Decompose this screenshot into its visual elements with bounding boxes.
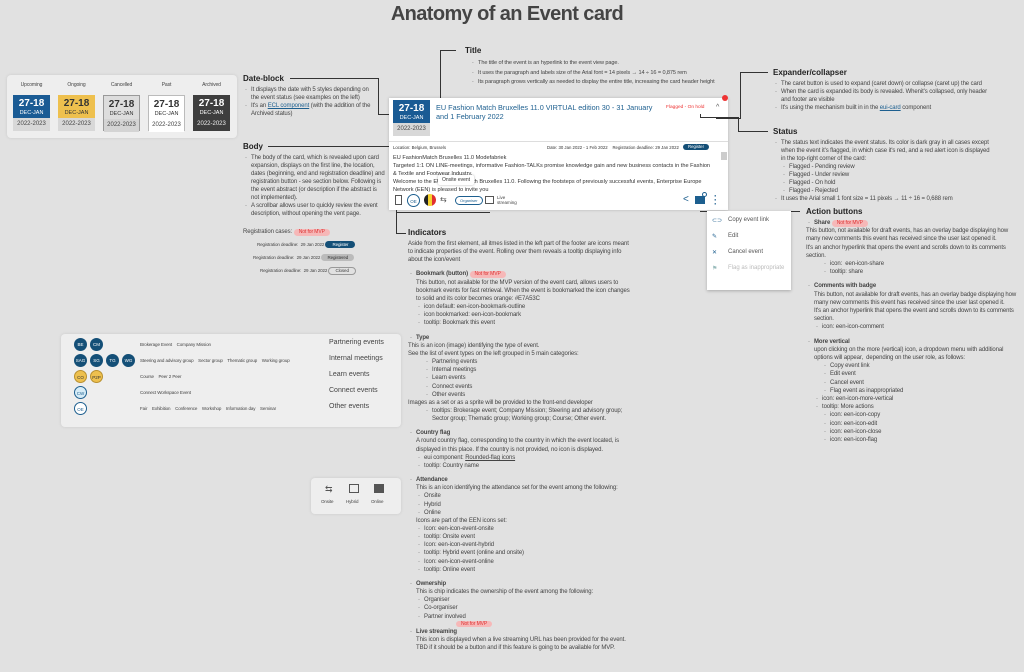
card body (389, 141, 728, 192)
text: indicators: Other events (432, 392, 465, 398)
panel: attendance icons (311, 478, 401, 514)
panel: date-block styles: 27-18 (109, 99, 134, 110)
card footer indicators: streaming (497, 200, 517, 205)
text: indicators: This is an icon identifying the attendance set for the event among the following: Icons are part of the EEN icons set: (416, 485, 618, 524)
registration cases: Registration deadline: 29 Jan 2022 (253, 255, 320, 260)
heading: expander: Expander/collapser (773, 68, 847, 77)
text: indicators: Connect events (432, 384, 472, 390)
row: other (74, 402, 369, 415)
panel: date-block styles: 27-18 (19, 98, 44, 109)
text: indicators: See the list of event types on the left grouped in 5 main categories: Images as a set or as a sprite will be provided to the front-end developer (408, 351, 593, 406)
text: action buttons: upon clicking on the more (vertical) icon, a dropdown menu with additional options will appear, depending on the user role, as follows: (814, 347, 1003, 361)
leader lines indicators (396, 210, 397, 234)
text: indicators: Co-organiser (424, 605, 457, 611)
text: indicators: Organiser (424, 597, 449, 603)
panel: date-block styles: 2022-2023 (197, 121, 226, 127)
card footer indicators: OE (410, 199, 417, 204)
dropdown menu: Edit (728, 233, 738, 239)
text: status: Flagged - Pending review (789, 164, 855, 170)
registration cases (243, 228, 356, 275)
text: title: Its paragraph grows vertically as needed to display the entire title, increasing the card header height (478, 79, 715, 85)
text: indicators: icon default: een-icon-bookmark-outline (424, 304, 525, 310)
row: partnering: Partnering events (329, 339, 384, 346)
text: indicators: Internal meetings (432, 367, 476, 373)
text: action buttons: icon: een-icon-comment (822, 324, 884, 330)
row: learn: P2P (92, 375, 101, 380)
row: connect: Connect Workspace Event (140, 390, 191, 395)
text: indicators: Not for MVP (461, 621, 487, 627)
text: date-block: It displays the date with 5 styles depending on the event status (see examples on the left) (251, 87, 369, 101)
row: partnering: Brokerage Event Company Mission (140, 342, 211, 347)
panel: date-block styles: 2022-2023 (62, 121, 91, 127)
heading: body: Body (243, 142, 263, 151)
text: indicators: tooltips: Brokerage event; Company Mission; Steering and advisory group; Sector group; Thematic group; Working group; Course; Other event. (432, 408, 622, 422)
text: indicators: Onsite (424, 493, 441, 499)
heading: date-block: Date-block (243, 74, 284, 83)
tooltip: onsite event (438, 175, 474, 185)
text: action buttons: Flag event as inappropriated (830, 388, 903, 394)
card action icons: · (714, 191, 717, 201)
panel: date-block styles: 2022-2023 (152, 122, 181, 128)
card body: Targeted 1:1 ON LINE-meetings, informative Fashion-TALKs promise knowledge gain and new business contacts in the Fashion & Textile and Footwear Industry. (393, 163, 710, 177)
tooltip: onsite event: Onsite event (442, 177, 470, 183)
panel: attendance icons: Hybrid (346, 499, 358, 504)
event card (389, 98, 728, 210)
row: learn: CO (77, 375, 84, 380)
text: action buttons: This button, not available for draft events, has an overlay badge displaying how many new comments this event has received since the user last opened it. (806, 228, 1008, 242)
text: action buttons: This button, not available for draft events, has an overlay badge displaying how many new comments this event has received since the user last opened it. (814, 292, 1016, 306)
text: status: Flagged - Rejected (789, 188, 838, 194)
text: indicators: This is chip indicates the ownership of the event among the following: (416, 589, 593, 595)
panel: date-block styles: 2022-2023 (17, 121, 46, 127)
text: body: A scrollbar allows user to quickly review the event description, without opening the vent page. (251, 203, 378, 217)
heading: indicators: Indicators (408, 228, 446, 237)
text: action buttons: More vertical (814, 339, 850, 345)
text: indicators: Learn events (432, 375, 466, 381)
dropdown menu: ⊂⊃ (712, 218, 722, 224)
dropdown menu: Copy event link (728, 217, 769, 223)
card date-block: 2022-2023 (397, 126, 426, 132)
text: expander: When the card is expanded its body is revealed. Whenit's collapsed, only header and footer are visible (781, 89, 987, 103)
title: Anatomy of an Event card (391, 3, 623, 25)
card action icons: · (714, 199, 717, 209)
text: indicators: Aside from the first element, all itmes listed in the left part of the footer are icons meant to indicate properties of the event. Rolling over them reveals a tooltip displaying info about the icon/event (408, 241, 629, 263)
dropdown menu (707, 211, 791, 290)
panel: date-block styles: 27-18 (64, 98, 89, 109)
row: internal: Steering and advisory group Sector group Thematic group Working group (140, 358, 290, 363)
text: indicators: Attendance (416, 477, 448, 483)
text: title: The title of the event is an hyperlink to the event view page. (478, 60, 619, 66)
row: internal (74, 354, 383, 367)
text: indicators: tooltip: Country name (424, 463, 479, 469)
text: action buttons: Share (814, 220, 830, 226)
card body: Location: Belgium, Brussels (393, 145, 446, 150)
text: body: The body of the card, which is revealed upon card expansion, displays on the first line, the location, dates (beginning, end and registration deadline) and registration button - see section below. Following is the event abstract (or description if the abstract is not implemented). (251, 155, 385, 201)
registration cases: Registration deadline: 29 Jan 2022 (257, 242, 324, 247)
panel: date-block styles: Upcoming (21, 82, 42, 88)
card date-block: DEC-JAN (400, 115, 423, 121)
text: status: Flagged - On hold (789, 180, 835, 186)
text: indicators (408, 240, 630, 651)
text: indicators: Icon: een-icon-event-hybrid (424, 542, 494, 548)
row: internal: WG (125, 358, 132, 363)
registration cases: Register (332, 242, 348, 247)
panel: date-block styles: 27-18 (199, 98, 224, 109)
text: indicators: Online (424, 510, 441, 516)
row: internal: TG (109, 358, 116, 363)
card action icons: · (714, 195, 717, 205)
card title: EU Fashion Match Bruxelles 11.0 VIRTUAL edition 30 - 31 January and 1 February 2022 (436, 103, 652, 120)
panel: event types (61, 334, 401, 427)
heading: title: Title (465, 46, 481, 55)
text: date-block: It's an ECL component (with the addition of the Archived status) (251, 103, 370, 117)
card date-block: 27-18 (399, 103, 424, 114)
dropdown menu: ✎ (712, 234, 717, 240)
panel: attendance icons: Online (371, 499, 383, 504)
row: partnering (74, 338, 384, 351)
panel: date-block styles: Past (162, 82, 171, 88)
text: action buttons: Cancel event (830, 380, 864, 386)
text: indicators: tooltip: Bookmark this event (424, 320, 495, 326)
text: expander: It's using the mechanism built in in the eui-card component (781, 105, 931, 111)
row: learn (74, 370, 370, 383)
registration cases: Closed (335, 268, 349, 273)
panel: date-block styles: DEC-JAN (200, 110, 223, 116)
row: learn: Course Peer 2 Peer (140, 374, 181, 379)
registration cases: Not for MVP (299, 229, 325, 235)
panel: date-block styles: 27-18 (154, 99, 179, 110)
text: indicators: tooltip: Hybrid event (online and onsite) (424, 550, 524, 556)
text: action buttons: It's an anchor hyperlink that opens the event and scrolls down to its comments section. (806, 245, 1006, 259)
text: action buttons: tooltip: More actions (822, 404, 874, 410)
heading: status: Status (773, 127, 797, 136)
registration cases: Registration cases: (243, 229, 292, 235)
text: indicators: This is an icon (image) identifying the type of event. (408, 343, 539, 349)
text: action buttons: Not for MVP (837, 220, 863, 226)
text: action buttons: icon: een-icon-close (830, 429, 881, 435)
panel: date-block styles: DEC-JAN (110, 111, 133, 117)
text: indicators: eui component: Rounded-flag icons (424, 455, 515, 461)
row: internal: SG (93, 358, 100, 363)
text: indicators: This icon is displayed when a live streaming URL has been provided for the event. TBD if it should be a button and if this feature is going to be available for MVP. (416, 637, 626, 651)
text: action buttons: tooltip: share (830, 269, 863, 275)
text: date-block (246, 86, 370, 117)
panel: date-block styles (7, 75, 237, 138)
text: indicators: Hybrid (424, 502, 441, 508)
row: other: Other events (329, 403, 369, 410)
text: action buttons: Edit event (830, 371, 856, 377)
text: action buttons: It's an anchor hyperlink that opens the event and scrolls down to its comments section. (814, 308, 1014, 322)
panel: date-block styles: DEC-JAN (20, 110, 43, 116)
registration cases: Registration deadline: 29 Jan 2022 (260, 268, 327, 273)
text: action buttons: Copy event link (830, 363, 870, 369)
text: status: Flagged - Under review (789, 172, 849, 178)
text: title: It uses the paragraph and labels size of the Arial font = 14 pixels → 14 ÷ 16 = 0,875 rem (478, 70, 687, 76)
text: action buttons: icon: een-icon-copy (830, 412, 880, 418)
registration cases: Registered (327, 255, 348, 260)
row: internal: Internal meetings (329, 355, 383, 362)
text: indicators: Ownership (416, 581, 446, 587)
panel: attendance icons: Onsite (321, 499, 333, 504)
status: Flagged - On hold (666, 105, 704, 110)
row: connect: Connect events (329, 387, 378, 394)
text: title (472, 60, 715, 85)
card action icons: < (683, 194, 689, 205)
panel: attendance icons: ⇆ (325, 484, 333, 494)
panel: date-block styles: DEC-JAN (65, 110, 88, 116)
dropdown menu: Cancel event (728, 249, 763, 255)
panel: date-block styles: DEC-JAN (155, 111, 178, 117)
text: indicators: Icon: een-icon-event-online (424, 559, 494, 565)
text: status: The status text indicates the event status. Its color is dark gray in all cases except when the event it's flagged, in which case it's red, and a red alert icon is displayed in the top-right corner of the card: (781, 140, 989, 162)
text: indicators: Partner involved (424, 614, 466, 620)
row: connect: CW (77, 391, 84, 396)
alert icon (722, 95, 728, 101)
text: status: It uses the Arial small 1 font size = 11 pixels → 11 ÷ 16 = 0,688 rem (781, 196, 953, 202)
text: indicators: Icon: een-icon-event-onsite (424, 526, 494, 532)
heading: action buttons: Action buttons (806, 207, 862, 216)
text: indicators: icon bookmarked: een-icon-bookmark (424, 312, 521, 318)
card footer indicators: Live (497, 195, 505, 200)
panel: date-block styles: Archived (202, 82, 221, 88)
card body: EU FashionMatch Bruxelles 11.0 Modefabriek (393, 155, 506, 161)
text: indicators: tooltip: Online event (424, 567, 475, 573)
row: learn: Learn events (329, 371, 369, 378)
panel: date-block styles: Ongoing (67, 82, 86, 88)
row: internal: SAG (76, 358, 85, 363)
text: action buttons: icon: een-icon-edit (830, 421, 877, 427)
card date-block (393, 100, 430, 136)
text: expander: The caret button is used to expand (caret down) or collapse (caret up) the card (781, 81, 982, 87)
card footer indicators (395, 194, 517, 207)
dropdown menu: Flag as inappropriate (728, 265, 784, 271)
dropdown menu: ✕ (712, 250, 717, 256)
text: indicators: Partnering events (432, 359, 477, 365)
row: other: Fair Exhibition Conference Workshop Information day Seminar (140, 406, 276, 411)
row: connect (74, 386, 378, 399)
text: action buttons (806, 220, 1016, 443)
row: partnering: BE (77, 342, 84, 347)
text: indicators: Type (416, 335, 429, 341)
expander caret: ^ (716, 104, 719, 111)
dropdown menu: ⚑ (712, 266, 717, 272)
text: indicators: tooltip: Onsite event (424, 534, 475, 540)
text: expander (776, 80, 988, 111)
text: indicators: A round country flag, corresponding to the country in which the event located, is displayed in this place. If the country is not provided, no icon is displayed. (416, 438, 619, 453)
text: indicators: Bookmark (button) (416, 271, 468, 277)
text: action buttons: Comments with badge (814, 283, 876, 289)
text: indicators: This button, not available for the MVP version of the event card, allows users to bookmark events for fast retrieval. When the event is bookmarked the icon changes to solid and its color becomes orange: #E7A53C (416, 280, 630, 302)
text: action buttons: icon: een-icon-more-vertical (822, 396, 893, 402)
text: indicators: Country flag (416, 430, 450, 436)
card footer indicators: Organiser (460, 198, 478, 203)
text: status (776, 140, 990, 202)
card footer indicators: ⇆ (440, 195, 447, 204)
card body: Register (688, 144, 704, 149)
row: partnering: CM (93, 342, 100, 347)
card body: Date: 30 Jan 2022 - 1 Feb 2022 Registration deadline: 29 Jan 2022 (547, 145, 679, 150)
text: indicators: Not for MVP (475, 271, 501, 277)
panel: date-block styles: 2022-2023 (107, 122, 136, 128)
row: other: OE (77, 407, 84, 412)
text: action buttons: icon: een-icon-flag (830, 437, 877, 443)
text: indicators: Live streaming (416, 629, 457, 635)
text: action buttons: icon: een-icon-share (830, 261, 884, 267)
card action icons (683, 191, 717, 209)
panel: date-block styles: Cancelled (111, 82, 132, 88)
